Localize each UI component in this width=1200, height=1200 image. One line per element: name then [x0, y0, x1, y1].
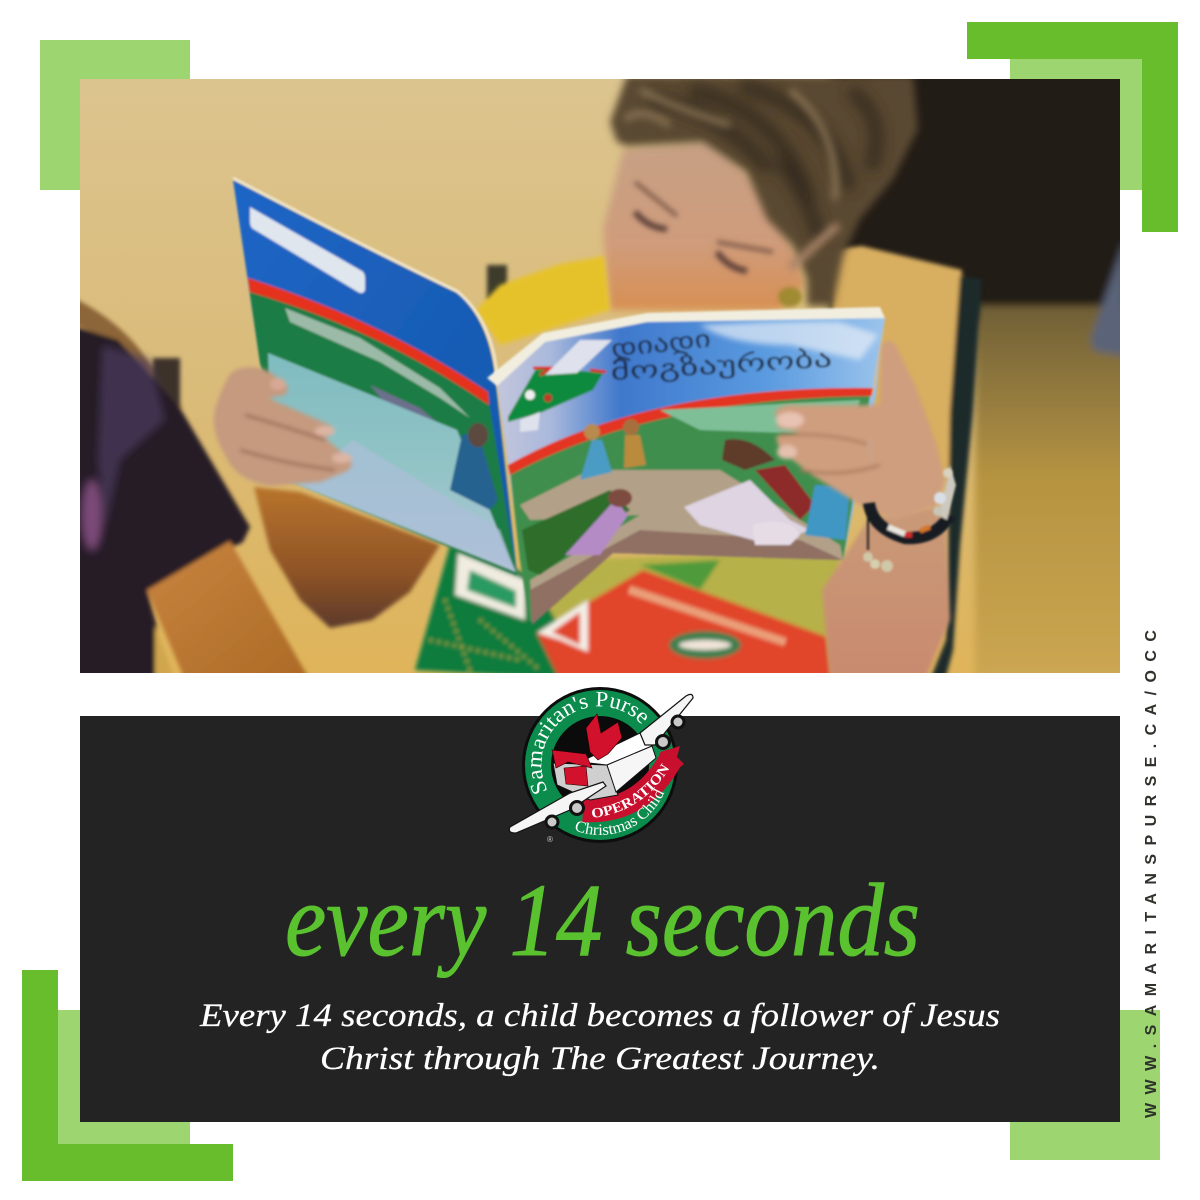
photo background wall — [80, 79, 981, 673]
girl: yellow shirt — [476, 256, 610, 345]
girl: left hand — [214, 367, 352, 486]
book: mascot box — [508, 367, 603, 422]
book: illustrated scene — [510, 396, 870, 622]
book: Georgian title: მოგზაურობა — [610, 344, 833, 386]
chair — [487, 246, 982, 680]
website vertical text: WWW.SAMARITANSPURSE.CA/OCC — [1143, 630, 1160, 1118]
box and shirt under book — [415, 545, 840, 680]
corner bracket: bottom right — [1010, 1010, 1160, 1160]
logo: registered mark: ® — [547, 835, 553, 844]
corner bracket: top left — [40, 40, 190, 190]
body text — [199, 998, 1000, 1077]
book: left page — [233, 178, 517, 575]
book: Georgian title — [611, 333, 832, 384]
body text: Christ through The Greatest Journey. — [320, 1041, 880, 1077]
heading: every 14 seconds — [285, 863, 920, 978]
logo: Samaritan's Purse Operation Christmas Child — [508, 687, 694, 844]
book: right page — [487, 307, 885, 625]
book: right page edge — [870, 318, 885, 405]
logo: red ribbon banner — [583, 757, 672, 810]
logo: green badge — [522, 687, 678, 843]
book: figure in blue — [450, 432, 498, 510]
left child — [70, 296, 310, 680]
book: label box — [250, 207, 365, 293]
book: Georgian title: დიადი — [610, 325, 712, 363]
book: page block — [487, 307, 885, 386]
girl: elbow beneath book — [254, 487, 440, 628]
girl: right hand — [775, 341, 945, 520]
dark text panel — [80, 716, 1120, 1122]
girl: forearm and wrist — [822, 505, 950, 680]
corner bracket: bottom left — [22, 970, 233, 1181]
book: illustration figures — [580, 440, 612, 480]
corner bracket: top right — [967, 22, 1178, 232]
dark background and floor — [830, 60, 1140, 686]
photo: girl reading The Greatest Journey book — [70, 60, 1140, 686]
logo: wheels — [546, 716, 684, 828]
logo: bow — [552, 714, 622, 786]
logo: gift box — [553, 733, 656, 800]
book: left text panel — [268, 353, 516, 572]
bracelets — [863, 465, 956, 572]
logo: wordmark: Christmas Child — [576, 788, 664, 835]
logo: wordmark — [530, 692, 669, 835]
logo: wordmark: OPERATION — [592, 763, 669, 818]
girl: hair and face — [603, 75, 918, 310]
book: left illustration — [248, 280, 517, 575]
logo: wordmark: Samaritan's Purse — [530, 692, 647, 794]
logo: plane wings — [509, 694, 693, 833]
body text: Every 14 seconds, a child becomes a follower of Jesus — [199, 998, 1000, 1034]
